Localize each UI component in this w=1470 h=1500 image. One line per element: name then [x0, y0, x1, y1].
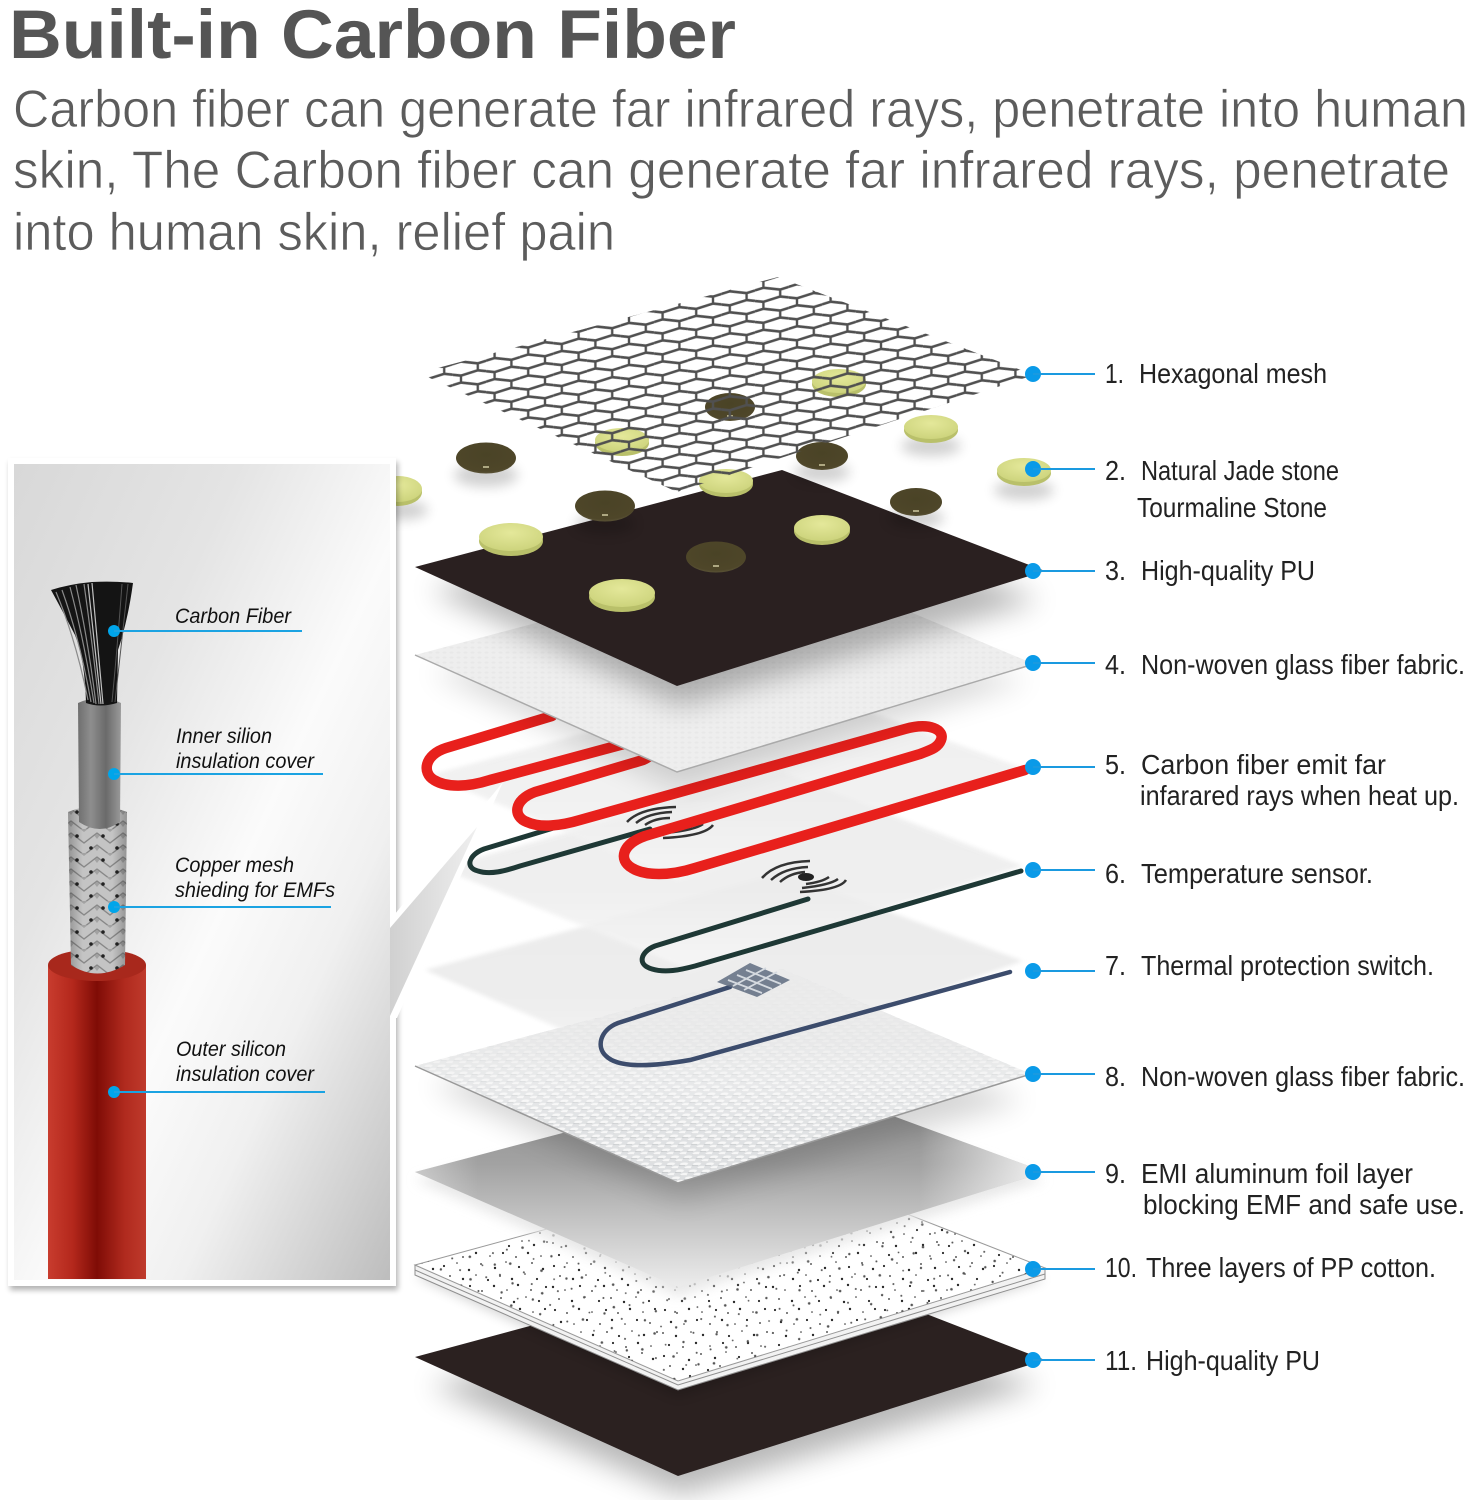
label 1	[1025, 358, 1327, 389]
label 7	[1025, 950, 1434, 981]
panel background	[14, 464, 390, 1280]
label 5: 5.	[1105, 749, 1126, 780]
label 6	[1025, 858, 1373, 889]
callout: copper mesh	[108, 854, 335, 913]
cable: inner silicon insulation	[78, 698, 121, 829]
callout: outer insulation	[108, 1038, 325, 1098]
icon: sensor signal upper	[627, 807, 713, 838]
label 9	[1025, 1158, 1465, 1220]
label 2: Tourmaline Stone	[1137, 492, 1327, 523]
label 3: 3.	[1105, 555, 1126, 586]
label 1: 1.	[1105, 358, 1124, 389]
label 11: 11.	[1105, 1345, 1137, 1376]
label 4: 4.	[1105, 649, 1126, 680]
label 5: Carbon fiber emit far	[1141, 749, 1386, 780]
layer 9: EMI aluminum foil	[415, 1075, 1045, 1296]
jade and tourmaline stones	[372, 369, 1054, 612]
stone shadows	[372, 436, 1054, 534]
carbon fiber heating wire	[427, 716, 1025, 874]
callout: carbon fiber	[108, 605, 302, 637]
intro text block: skin, The Carbon fiber can generate far infrared rays, penetrate	[13, 141, 1450, 200]
jade stones	[374, 369, 1051, 612]
callout: copper mesh: shieding for EMFs	[175, 879, 335, 902]
label 11: High-quality PU	[1146, 1345, 1320, 1376]
inset panel: cable cross-section	[8, 458, 503, 1290]
thermal protection switch wire	[601, 972, 1010, 1065]
cable: copper mesh shielding	[68, 806, 127, 974]
layer 5: heating wire sheet	[430, 680, 1023, 880]
label 2: Natural Jade stone	[1141, 455, 1339, 486]
label 7: 7.	[1105, 950, 1126, 981]
label 3	[1025, 555, 1315, 586]
panel shadow	[10, 462, 398, 1290]
layer 10: PP cotton	[415, 1165, 1045, 1396]
label 6: 6.	[1105, 858, 1126, 889]
callout: inner insulation: insulation cover	[176, 750, 315, 773]
callout: inner insulation: Inner silion	[176, 725, 272, 748]
exploded layer stack	[372, 277, 1054, 1495]
callout wedge	[390, 782, 503, 1018]
layer 8: glass fiber fabric	[415, 969, 1031, 1200]
cable: carbon fiber strands	[51, 582, 133, 706]
layer 3: PU	[415, 470, 1045, 705]
cable: outer silicon insulation	[48, 949, 146, 1279]
layer 1: hexagonal mesh	[419, 277, 1034, 492]
callout: inner insulation	[108, 725, 323, 780]
callout: outer insulation: insulation cover	[176, 1063, 315, 1086]
layer 11: PU base	[415, 1258, 1045, 1495]
label 8: 8.	[1105, 1061, 1126, 1092]
temperature sensor wire	[470, 826, 1021, 971]
label 10: Three layers of PP cotton.	[1146, 1252, 1436, 1283]
intro text block: into human skin, relief pain	[13, 203, 615, 262]
layer 7: thermal switch sheet	[425, 872, 1023, 1080]
layer 6: sensor sheet	[440, 772, 1023, 970]
label 5	[1025, 749, 1459, 811]
label 10: 10.	[1105, 1252, 1137, 1283]
label 7: Thermal protection switch.	[1141, 950, 1434, 981]
panel frame	[8, 458, 396, 1286]
label 9: EMI aluminum foil layer	[1141, 1158, 1413, 1189]
icon: sensor signal lower	[762, 861, 846, 892]
label 3: High-quality PU	[1141, 555, 1315, 586]
label 11	[1025, 1345, 1320, 1376]
callout: carbon fiber: Carbon Fiber	[175, 605, 292, 628]
icon: thermal switch chip	[717, 963, 790, 997]
label 1: Hexagonal mesh	[1139, 358, 1327, 389]
label 10	[1025, 1252, 1436, 1283]
label 6: Temperature sensor.	[1141, 858, 1373, 889]
layer 4: glass fiber fabric	[415, 558, 1034, 790]
intro text block	[13, 80, 1468, 262]
label 9: 9.	[1105, 1158, 1126, 1189]
callout: outer insulation: Outer silicon	[176, 1038, 286, 1061]
label 2	[1025, 455, 1339, 523]
tourmaline stones	[456, 393, 942, 572]
callout: copper mesh: Copper mesh	[175, 854, 294, 877]
label 2: 2.	[1105, 455, 1126, 486]
